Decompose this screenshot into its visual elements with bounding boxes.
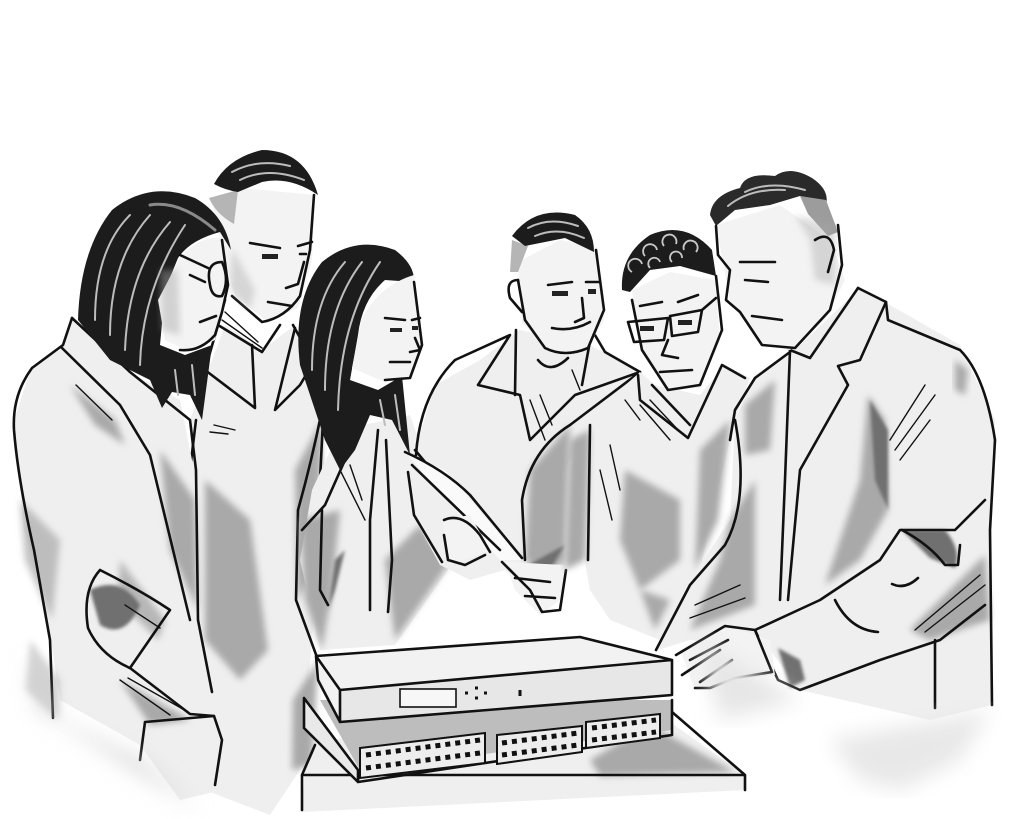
coat: man in the centre: [408, 330, 640, 612]
lower unit: [304, 698, 672, 782]
coat: woman with glasses: [14, 318, 222, 800]
coat: woman in the centre: [300, 415, 448, 650]
coat: man behind: [190, 300, 325, 815]
table: [302, 712, 745, 812]
face: woman with glasses: [158, 238, 228, 352]
head: man in the centre: [509, 213, 604, 353]
hand of man on the right: [676, 625, 775, 690]
hair: woman with glasses: [78, 191, 231, 420]
sweater: man with curly hair: [565, 365, 750, 640]
coat: man on the right: [656, 288, 995, 720]
head: man behind: [209, 150, 318, 322]
hands holding the tablet: [442, 515, 566, 615]
person: man in the centre holding a tablet: [405, 213, 640, 615]
person: woman with glasses, far left: [14, 191, 231, 800]
head: man with curly hair: [622, 230, 722, 390]
person: man with curly hair and glasses: [565, 230, 750, 640]
person: man behind, second from left: [190, 150, 325, 815]
soft grey wash beneath the figures: [25, 640, 990, 810]
face: woman in the centre: [352, 275, 422, 382]
person: woman in the centre: [298, 245, 448, 650]
tablet held by man in the centre: [405, 452, 522, 560]
upper unit: [316, 637, 672, 722]
head: man on the right: [710, 171, 845, 350]
person: man on the right: [656, 171, 995, 720]
hair: woman in the centre: [298, 245, 414, 470]
device: stacked equipment: [304, 637, 672, 782]
